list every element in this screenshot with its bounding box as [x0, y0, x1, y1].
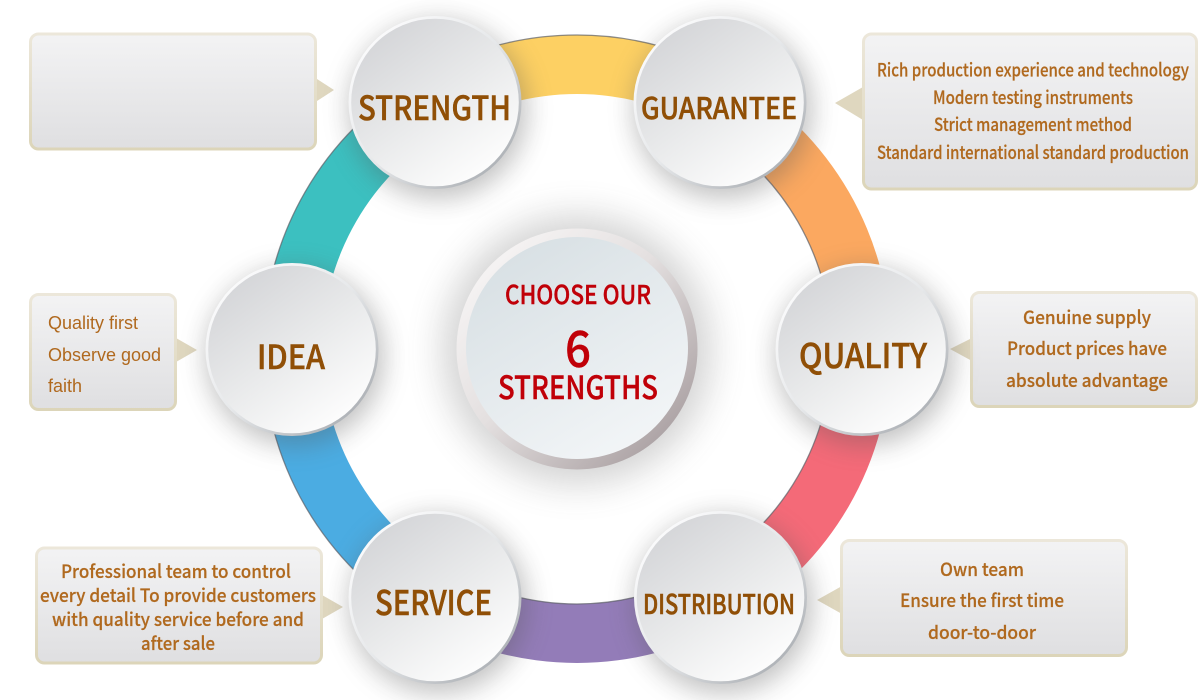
callout: distribution: door-to-door [928, 619, 1037, 645]
centre badge: STRENGTHS [498, 363, 658, 409]
segment: orange [704, 77, 891, 349]
callout: strength (empty) [30, 34, 334, 149]
segment: yellow [420, 35, 734, 128]
callout: quality [950, 292, 1196, 406]
callout: idea: Observe good [48, 345, 161, 365]
node: quality [776, 263, 954, 446]
callout: idea [30, 294, 197, 410]
callout: service: after sale [141, 630, 215, 656]
node: service: SERVICE [375, 576, 492, 625]
node: quality: QUALITY [799, 329, 927, 378]
node: guarantee [634, 16, 812, 198]
callout: service: every detail To provide customers [40, 582, 316, 608]
node: guarantee: GUARANTEE [641, 84, 797, 128]
node: distribution: DISTRIBUTION [643, 583, 795, 622]
node: distribution [634, 511, 812, 694]
callout: idea: faith [48, 376, 82, 396]
centre badge [443, 216, 711, 484]
callout: guarantee: Modern testing instruments [933, 84, 1133, 110]
callout: distribution: Own team [940, 556, 1024, 582]
callout: guarantee: Strict management method [934, 111, 1132, 137]
callout: quality: absolute advantage [1006, 367, 1168, 393]
callout: service: Professional team to control [61, 558, 291, 584]
callout: quality: Product prices have [1007, 335, 1167, 361]
callout: distribution [817, 540, 1126, 656]
callout: idea: Quality first [48, 313, 138, 333]
centre badge: 6 [565, 310, 591, 382]
node: idea: IDEA [257, 331, 325, 379]
segment: blue [263, 349, 450, 621]
centre badge: CHOOSE OUR [505, 275, 651, 312]
segment: red [704, 349, 891, 621]
segment: teal [263, 77, 450, 349]
callout: service: with quality service before and [52, 606, 304, 632]
node: idea [206, 263, 384, 446]
callout: guarantee [835, 34, 1196, 189]
callout: quality: Genuine supply [1023, 304, 1151, 330]
ring: six coloured segments [263, 35, 891, 663]
node: strength: STRENGTH [358, 82, 511, 130]
callout: distribution: Ensure the first time [900, 587, 1064, 613]
node: strength [348, 16, 527, 198]
callout: service [36, 548, 343, 663]
node: service [348, 511, 527, 694]
segment: purple [420, 570, 734, 663]
